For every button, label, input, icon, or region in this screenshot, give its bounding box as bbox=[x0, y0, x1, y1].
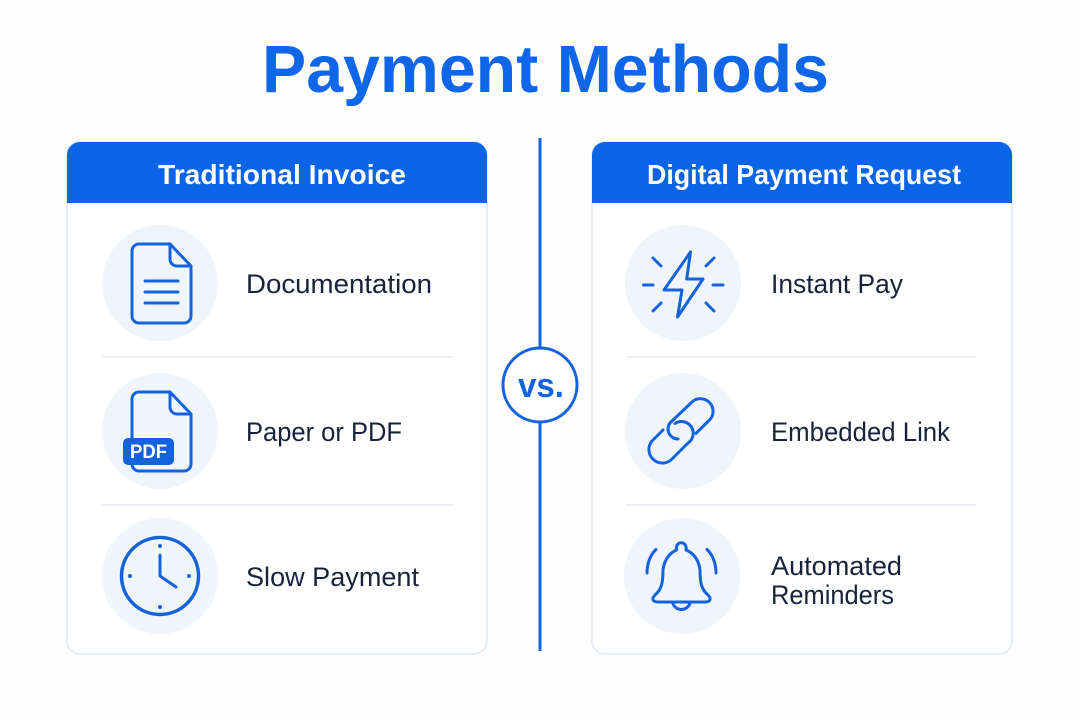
icon: chain link bbox=[625, 373, 741, 489]
icon: clock bbox=[102, 518, 218, 634]
header: traditional invoice: Traditional Invoice bbox=[158, 159, 406, 190]
label: automated reminders: Automated bbox=[771, 551, 902, 581]
label: embedded link: Embedded Link bbox=[771, 417, 951, 447]
label: automated reminders: Reminders bbox=[771, 580, 894, 610]
label: slow payment: Slow Payment bbox=[246, 562, 420, 592]
label: documentation: Documentation bbox=[246, 269, 432, 299]
header: digital payment request: Digital Payment Request bbox=[647, 159, 961, 190]
panel: traditional invoice bbox=[67, 142, 487, 654]
icon: pdf file bbox=[102, 373, 218, 489]
icon: lightning bolt bbox=[625, 225, 741, 341]
icon: bell bbox=[624, 518, 740, 634]
header: traditional invoice bbox=[67, 142, 487, 203]
title: Payment Methods bbox=[262, 32, 829, 107]
label: paper or pdf: Paper or PDF bbox=[246, 417, 402, 447]
header: digital payment request bbox=[592, 142, 1012, 203]
center divider with vs badge bbox=[503, 138, 577, 651]
label: automated reminders bbox=[771, 551, 902, 610]
icon: document bbox=[102, 225, 218, 341]
icon: pdf file: PDF bbox=[130, 442, 167, 463]
label: instant pay: Instant Pay bbox=[771, 269, 904, 299]
panel: digital payment request bbox=[592, 142, 1012, 654]
center divider with vs badge: vs. bbox=[518, 367, 564, 405]
